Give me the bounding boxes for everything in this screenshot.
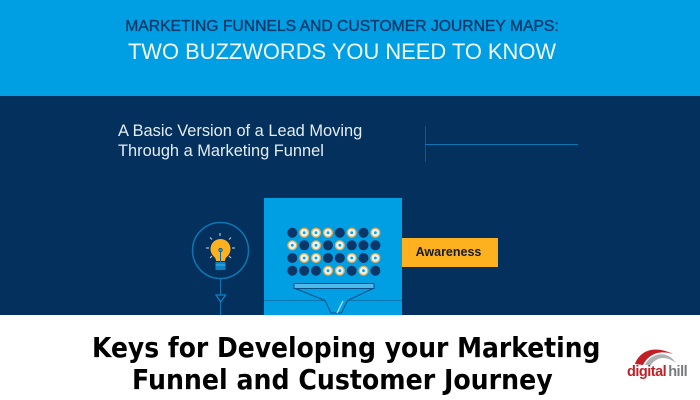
arrow: connector with triangle [216,279,226,315]
text: section subtitle: Through a Marketing Funnel [118,142,324,160]
icon: logo arcs [635,350,676,365]
icon: lightbulb in circle [192,222,248,278]
title: bottom caption line one: Keys for Developing your Marketing [92,332,600,364]
title: bottom caption line two: Funnel and Customer Journey [132,364,553,396]
icon: funnel [264,284,402,313]
callout: awareness label [402,238,498,267]
dot grid: leads [287,228,380,276]
text: section subtitle: A Basic Version of a Lead Moving [118,122,362,140]
divider lines beside subtitle [425,126,578,162]
panel: funnel blue box [264,198,402,315]
logo: digital hill [627,350,687,380]
text: section subtitle [118,122,362,160]
panel: navy funnel section [0,96,700,315]
panel: top header band [0,0,700,96]
heading: dark title line: MARKETING FUNNELS AND CUSTOMER JOURNEY MAPS: [125,18,559,35]
text: logo wordmark: digitalhill [627,364,687,380]
text: awareness word: Awareness [416,245,481,259]
chart: journey lines and funnel diagram [192,126,578,315]
heading: white title line: TWO BUZZWORDS YOU NEED TO KNOW [128,39,556,64]
